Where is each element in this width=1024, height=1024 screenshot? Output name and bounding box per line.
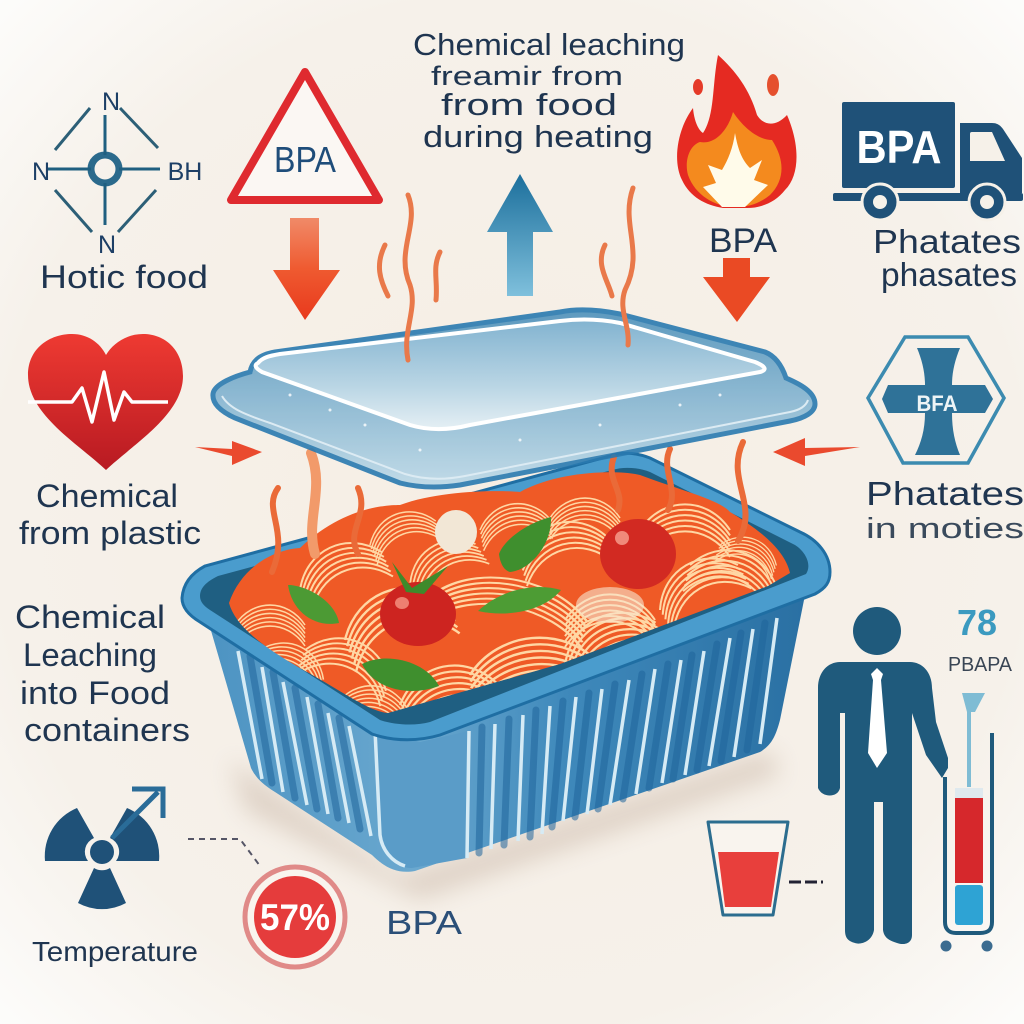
arrow: red pointing left	[773, 438, 860, 466]
icon: heart with pulse	[28, 334, 183, 470]
tub rim	[182, 453, 830, 740]
ribs light	[238, 618, 777, 866]
label: chemical leaching into food containers: Chemical	[15, 599, 165, 635]
tomato back	[600, 519, 676, 589]
lid speckles	[288, 394, 722, 452]
icon: BPA truck	[833, 102, 1023, 220]
icon: person	[818, 607, 948, 944]
icon: molecule diagram	[32, 88, 202, 259]
basil leaves	[288, 585, 339, 624]
spaghetti strands	[238, 497, 777, 713]
tub body	[205, 595, 805, 872]
label: chemical from plastic: Chemical	[36, 478, 178, 514]
heading: chemical leaching caption: freamir from	[431, 61, 623, 91]
icon: BPA hexagon: BFA	[916, 391, 958, 416]
icon: glass of red liquid	[708, 822, 788, 915]
icon: molecule diagram: N	[32, 158, 50, 186]
heading: chemical leaching caption: from food	[441, 87, 617, 122]
stat: 78 PBAPA: PBAPA	[948, 654, 1013, 676]
icon: test tube	[940, 693, 992, 952]
label: phatates plasates: Phatates	[873, 223, 1021, 260]
label: phatates in moties: Phatates	[866, 475, 1024, 512]
heading: chemical leaching caption	[413, 27, 685, 154]
arrow: red pointing right	[195, 441, 262, 465]
label: phatates in moties	[866, 475, 1024, 545]
label: phatates plasates	[873, 223, 1021, 293]
icon: BPA warning triangle: BPA	[274, 139, 336, 180]
label: phatates in moties: in moties	[866, 513, 1024, 545]
label: chemical leaching into food containers: Leaching	[23, 637, 157, 673]
icon: molecule diagram: N	[102, 88, 120, 116]
icon: BPA warning triangle	[231, 72, 379, 200]
badge: 57 percent: 57%	[260, 897, 330, 938]
label: BPA bottom: BPA	[386, 904, 462, 941]
lid	[213, 310, 815, 487]
icon: radiation symbol	[45, 808, 159, 909]
pasta shell	[435, 510, 477, 554]
label: chemical leaching into food containers	[15, 599, 190, 748]
shadow under container	[230, 750, 780, 900]
label: chemical from plastic: from plastic	[19, 515, 201, 551]
stat: 78 PBAPA: 78	[957, 602, 997, 643]
label: chemical from plastic	[19, 478, 201, 551]
stat: 78 PBAPA	[948, 602, 1013, 676]
noodle highlight	[576, 587, 644, 623]
tub opening	[200, 468, 808, 724]
steam: rising wisps	[379, 188, 633, 360]
icon: BPA hexagon	[868, 337, 1004, 463]
label: chemical leaching into food containers: containers	[24, 712, 190, 748]
container base with food	[182, 453, 830, 872]
label: chemical leaching into food containers: into Food	[20, 675, 170, 711]
arrow: red down right	[703, 258, 770, 322]
arrow: blue diagonal	[112, 789, 163, 838]
label: BPA under flame: BPA	[709, 222, 777, 260]
label: hotic food: Hotic food	[40, 259, 208, 295]
icon: BPA truck: BPA	[856, 121, 942, 173]
heading: chemical leaching caption: during heating	[423, 119, 653, 154]
arrow: blue up	[487, 174, 553, 296]
icon: molecule diagram: BH	[168, 158, 202, 186]
dashed connector: glass to person	[789, 880, 823, 884]
icon: molecule diagram: N	[98, 231, 116, 259]
label: phatates plasates: phasates	[881, 256, 1017, 293]
badge: 57 percent	[245, 867, 345, 967]
dashed connector	[188, 839, 260, 866]
front panel highlight	[375, 730, 469, 868]
food base	[229, 472, 790, 713]
icon: flame	[677, 55, 797, 208]
arrow: red down left	[273, 218, 340, 320]
ribs dark	[250, 623, 765, 853]
label: temperature: Temperature	[32, 936, 198, 967]
tomato front	[380, 582, 456, 646]
steam: flames at tub rim	[272, 442, 746, 572]
heading: chemical leaching caption: Chemical leaching	[413, 27, 685, 62]
